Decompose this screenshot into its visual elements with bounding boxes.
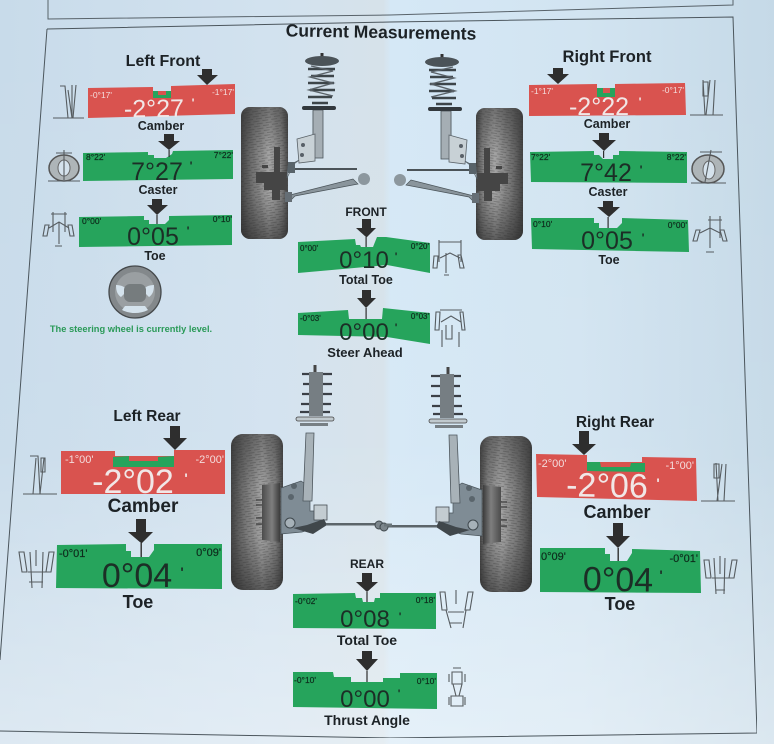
icon: camber [690, 80, 723, 115]
rear right suspension illustration [380, 367, 532, 592]
label: camber: Camber [108, 496, 179, 517]
icon: toe [19, 550, 54, 588]
gauge: right rear toe: -0°01' [669, 553, 698, 565]
label: toe: Toe [605, 594, 635, 614]
gauge: left front camber: -1°17' [212, 87, 234, 97]
front left suspension illustration [241, 53, 370, 239]
gauge: steer ahead: ' [395, 322, 398, 334]
arrow: front total toe [356, 219, 376, 247]
gauge: right front caster: 7°42 [580, 159, 632, 187]
gauge: left rear toe: ' [180, 564, 184, 580]
gauge: front total toe: 0°00' [300, 244, 319, 253]
gauge: left front caster: 7°22' [214, 150, 233, 160]
gauge: left front camber [88, 84, 235, 123]
arrow: left front caster [158, 134, 180, 157]
gauge: left front toe: 0°00' [82, 216, 102, 226]
icon: total toe [433, 240, 464, 275]
gauge: right front toe: 0°10' [533, 219, 553, 229]
label: toe: Toe [123, 592, 153, 612]
arrow: right front toe [597, 201, 620, 228]
gauge: right rear toe [540, 548, 701, 600]
gauge: thrust angle: 0°00 [340, 686, 390, 713]
gauge: right rear camber: -2°06 [566, 466, 648, 506]
gauge: left front caster [83, 150, 233, 186]
gauge: right rear toe: ' [659, 567, 663, 583]
gauge: steer ahead: -0°03' [300, 314, 321, 323]
gauge: right rear camber [536, 454, 697, 506]
arrow: left front toe [147, 199, 168, 224]
arrow: thrust angle [356, 651, 378, 685]
gauge: left front toe: 0°10' [213, 214, 232, 224]
arrow: steer ahead [357, 290, 376, 319]
gauge: steer ahead: 0°00 [339, 319, 389, 346]
icon: toe [704, 556, 737, 594]
icon: camber [23, 456, 57, 494]
gauge: rear total toe: 0°18' [416, 595, 435, 605]
gauge: left front caster: 7°27 [131, 158, 183, 186]
label: steer ahead: Steer Ahead [327, 345, 403, 360]
gauge: front total toe: ' [395, 251, 398, 263]
gauge: left front camber: -0°17' [90, 90, 112, 100]
gauge: left front toe: 0°05 [127, 223, 179, 251]
gauge: left rear toe [56, 544, 222, 595]
gauge: right rear toe: 0°04 [583, 560, 653, 600]
label: camber: Camber [584, 117, 630, 131]
arrow: right rear toe [606, 523, 630, 563]
label: toe: Toe [598, 253, 620, 267]
heading: front: FRONT [345, 205, 387, 219]
gauge: right front camber: -0°17' [662, 85, 684, 95]
gauge: right front toe: 0°05 [581, 227, 633, 255]
gauge: left rear camber: -2°02 [92, 463, 174, 501]
gauge: right front caster: 8°22' [667, 152, 686, 162]
icon: camber [701, 463, 735, 501]
gauge: thrust angle: 0°10' [417, 676, 436, 686]
icon: steer ahead [435, 310, 465, 347]
panel: right front [529, 48, 727, 267]
report box outline top [48, 0, 733, 19]
arrow: right rear camber [572, 431, 596, 455]
gauge: left front toe: ' [187, 224, 190, 238]
gauge: left front caster: 8°22' [86, 152, 106, 162]
panel: front centre [298, 205, 465, 360]
front right suspension illustration [394, 54, 523, 240]
icon: caster [48, 150, 80, 181]
gauge: rear total toe: -0°02' [295, 596, 317, 606]
gauge: rear total toe [293, 593, 436, 633]
gauge: front total toe: 0°20' [411, 242, 429, 251]
panel: right rear [536, 414, 737, 614]
gauge: right front camber [529, 83, 686, 121]
icon: camber [53, 85, 84, 118]
title: Current Measurements [286, 20, 477, 44]
gauge: right rear toe: 0°09' [541, 551, 566, 563]
gauge: right front camber: -1°17' [531, 86, 553, 96]
icon: toe [693, 216, 727, 252]
arrow: left front camber [197, 69, 218, 85]
label: caster: Caster [589, 185, 628, 199]
gauge: left front toe [79, 214, 232, 251]
gauge: left rear camber [61, 450, 225, 501]
gauge: right rear camber: -1°00' [665, 460, 694, 472]
arrow: rear total toe [356, 573, 378, 602]
heading: left front: Left Front [126, 53, 201, 70]
gauge: right rear camber: -2°00' [538, 458, 567, 470]
gauge: left front camber: ' [192, 96, 195, 110]
arrow: left rear camber [163, 426, 187, 450]
label: thrust angle: Thrust Angle [324, 712, 410, 728]
arrow: right front caster [592, 133, 616, 158]
gauge: left rear camber: -1°00' [65, 454, 94, 466]
gauge: right front caster: 7°22' [531, 152, 551, 162]
gauge: right rear camber: ' [656, 475, 660, 491]
gauge: rear total toe: ' [399, 611, 402, 623]
heading: left rear: Left Rear [113, 408, 181, 425]
label: caster: Caster [139, 183, 178, 197]
label: toe: Toe [144, 249, 166, 263]
note: steering wheel status: The steering wheel is currently level. [50, 324, 212, 334]
icon: caster [691, 150, 726, 183]
icon: toe [43, 212, 74, 246]
gauge: left rear toe: 0°09' [196, 547, 221, 559]
gauge: left rear toe: -0°01' [59, 548, 88, 560]
gauge: thrust angle: ' [398, 688, 401, 700]
gauge: right front toe: ' [642, 231, 645, 245]
gauge: left rear camber: -2°00' [195, 454, 224, 466]
panel: left front [43, 53, 235, 263]
gauge: right front camber: -2°22 [569, 93, 629, 121]
gauge: right front caster [530, 151, 687, 187]
heading: rear: REAR [350, 557, 384, 571]
arrow: right front camber [547, 68, 569, 84]
gauge: thrust angle [293, 672, 437, 713]
gauge: rear total toe: 0°08 [340, 606, 390, 633]
icon: total toe [440, 590, 473, 628]
gauge: front total toe [298, 237, 430, 274]
label: front total toe: Total Toe [339, 273, 393, 287]
label: rear total toe: Total Toe [337, 632, 397, 648]
label: camber: Camber [138, 119, 184, 133]
gauge: right front caster: ' [640, 163, 643, 177]
gauge: right front toe [531, 218, 689, 255]
panel: left rear [19, 408, 225, 612]
gauge: left rear camber: ' [184, 470, 188, 486]
gauge: front total toe: 0°10 [339, 247, 389, 274]
icon: steering wheel [109, 266, 161, 318]
icon: thrust angle [449, 668, 465, 706]
gauge: left front camber: -2°27 [124, 95, 184, 123]
label: camber: Camber [583, 502, 651, 522]
gauge: thrust angle: -0°10' [294, 675, 316, 685]
rear axle centre link [384, 524, 392, 526]
heading: right rear: Right Rear [576, 414, 654, 431]
gauge: steer ahead [298, 308, 430, 346]
heading: right front: Right Front [563, 48, 652, 66]
gauge: right front toe: 0°00' [668, 220, 687, 230]
rear left suspension illustration [231, 365, 383, 590]
gauge: left front caster: ' [190, 159, 193, 173]
gauge: right front camber: ' [639, 95, 642, 109]
gauge: left rear toe: 0°04 [102, 557, 172, 595]
gauge: steer ahead: 0°03' [411, 312, 429, 321]
panel: rear centre [293, 557, 473, 728]
arrow: left rear toe [128, 519, 153, 558]
